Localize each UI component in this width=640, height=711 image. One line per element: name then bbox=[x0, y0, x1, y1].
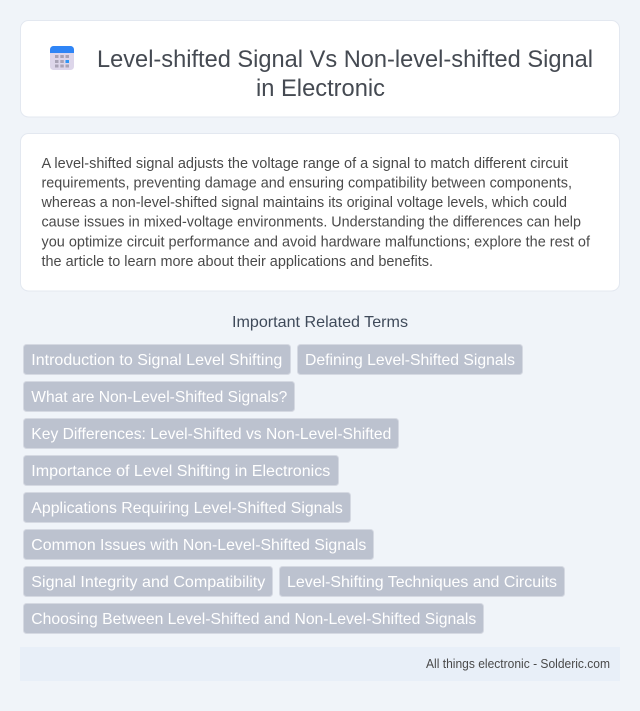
panel: related terms tags bbox=[24, 344, 564, 634]
tag: applications bbox=[24, 492, 350, 522]
tag: defining bbox=[298, 344, 522, 374]
tag: techniques bbox=[280, 566, 564, 596]
tag: common issues: Common Issues with Non-Level-Shifted Signals bbox=[31, 537, 366, 554]
tag: non-level-shifted bbox=[24, 382, 294, 412]
tag: key differences: Key Differences: Level-Shifted vs Non-Level-Shifted bbox=[31, 426, 391, 443]
footer: All things electronic - Solderic.com bbox=[426, 657, 610, 671]
title bbox=[97, 46, 593, 102]
tag: importance: Importance of Level Shifting in Electronics bbox=[31, 463, 330, 480]
text block: introduction paragraph: you optimize circuit performance and avoid hardware malfunctions; explore the rest of bbox=[42, 233, 591, 250]
tag: choosing bbox=[24, 604, 484, 634]
text block: introduction paragraph bbox=[41, 155, 591, 270]
panel: title header bbox=[20, 20, 620, 117]
icon: calendar bbox=[50, 46, 74, 70]
text block: introduction paragraph: requirements, preventing damage and ensuring compatibility between components, bbox=[42, 174, 572, 192]
tag: choosing: Choosing Between Level-Shifted and Non-Level-Shifted Signals bbox=[31, 611, 476, 628]
tag: common issues bbox=[24, 530, 374, 560]
tag: defining: Defining Level-Shifted Signals bbox=[305, 352, 515, 369]
tag: introduction bbox=[24, 344, 290, 374]
text block: introduction paragraph: the article to learn more about their applications and benefits. bbox=[42, 253, 433, 270]
text block: introduction paragraph: A level-shifted signal adjusts the voltage range of a signal to match different circuit bbox=[42, 155, 569, 172]
footer bbox=[20, 647, 620, 681]
heading: important related terms: Important Related Terms bbox=[232, 314, 408, 331]
panel: introduction bbox=[20, 134, 620, 291]
tag: importance bbox=[24, 456, 338, 486]
tag: non-level-shifted: What are Non-Level-Shifted Signals? bbox=[31, 389, 287, 406]
tag: introduction: Introduction to Signal Level Shifting bbox=[31, 352, 282, 369]
title: Level-shifted Signal Vs Non-level-shifted Signal bbox=[97, 46, 593, 73]
text block: introduction paragraph: cause issues in mixed-voltage environments. Understanding the differences can help bbox=[42, 214, 581, 231]
title: in Electronic bbox=[256, 75, 385, 102]
tag: signal integrity: Signal Integrity and Compatibility bbox=[31, 574, 265, 591]
tag: signal integrity bbox=[24, 566, 272, 596]
tag: key differences bbox=[24, 418, 398, 448]
text block: introduction paragraph: whereas a non-level-shifted signal maintains its original voltage levels, which could bbox=[41, 194, 567, 211]
tag: techniques: Level-Shifting Techniques and Circuits bbox=[287, 574, 557, 591]
tag: applications: Applications Requiring Level-Shifted Signals bbox=[31, 500, 343, 517]
